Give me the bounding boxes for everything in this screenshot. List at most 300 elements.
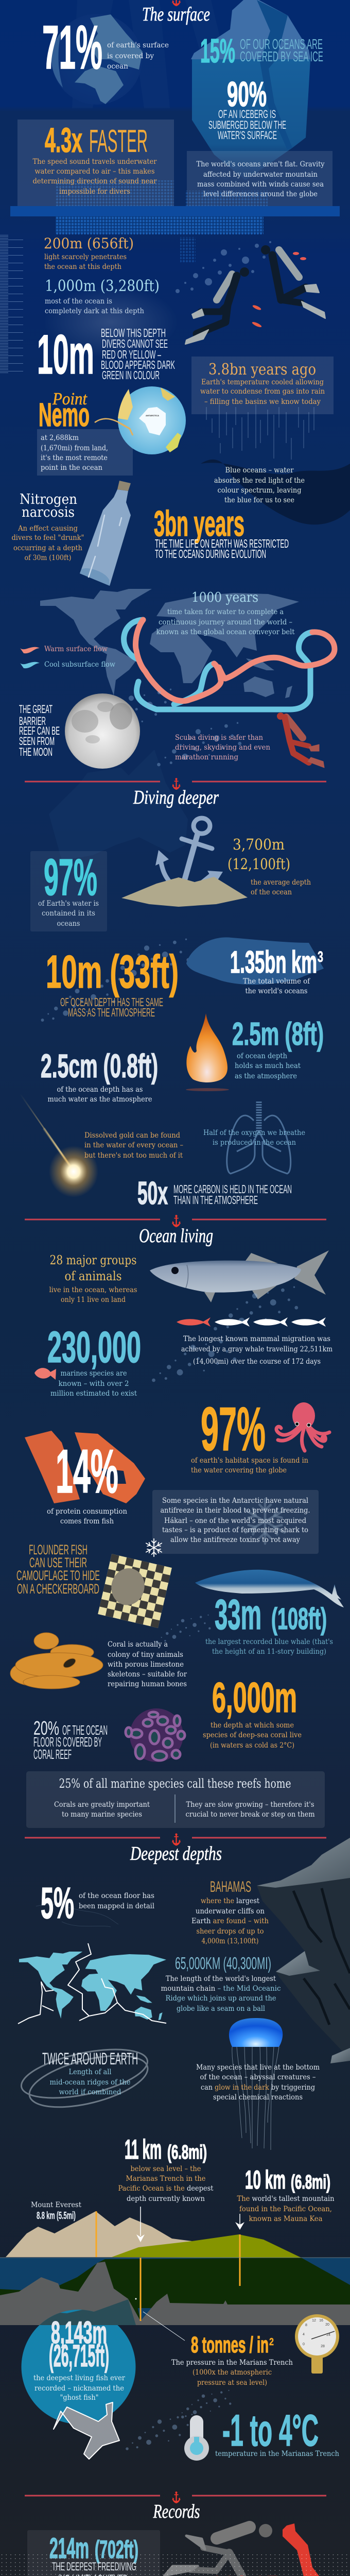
icon: pressure gauge: 0 (303, 2343, 305, 2346)
iceberg (191, 0, 310, 180)
text: twice around earth: world if combined (59, 2088, 121, 2096)
text: 28 major groups: 28 major groups (49, 1253, 137, 1267)
illustration: anchor in sand (121, 818, 248, 907)
illustration: underwater cliffs (257, 1838, 350, 2063)
icon: red diver (277, 713, 324, 768)
panel: reefs home: to many marine species (62, 1810, 142, 1819)
text: mountain chain: The length of the world's longest (166, 1975, 276, 1983)
panel: freediving record (27, 2530, 160, 2576)
icon: pressure gauge: 28 (321, 2345, 325, 2348)
stat: 33m whale: the height of an 11-story building) (212, 1648, 326, 1656)
stat: 50x carbon: 50x (137, 1176, 168, 1211)
icon: pressure gauge: 4 (303, 2333, 305, 2336)
legend: flows (20, 645, 115, 669)
text: dissolved gold: in the water of every ocean – (84, 1141, 183, 1149)
stat: 10m 33ft: OF OCEAN DEPTH HAS THE SAME (60, 995, 163, 1009)
stat: heat depth (232, 1016, 324, 1080)
panel: point nemo: it's the most remote (41, 454, 108, 462)
stat: 230000: 230,000 (47, 1323, 141, 1372)
bubbles near scuba text (157, 722, 241, 766)
image: flounder on checkerboard (98, 1554, 172, 1628)
illustration: flame (186, 1013, 229, 1091)
text: bahamas: underwater cliffs on (196, 1907, 265, 1916)
text: mountain chain: Ridge which joins up around the (166, 1994, 276, 2003)
icon: red fish (34, 1368, 56, 1380)
stat: water depth: much water as the atmosphere (47, 1095, 152, 1104)
text: OF THE OCEAN (62, 1722, 108, 1738)
divider: records (25, 2492, 326, 2503)
dark swirl (201, 460, 350, 524)
panel: 4.3x faster: The speed sound travels underwater (33, 158, 157, 166)
illustration: two divers (185, 245, 325, 344)
heading: diving deeper: Diving deeper (133, 787, 219, 808)
stat: pressure: 2 (269, 2336, 274, 2348)
text: scuba safer (175, 734, 270, 761)
panel: point nemo: at 2,688km (41, 434, 79, 442)
illustration: ghost fish (54, 2402, 119, 2459)
text: mountain chain: globe like a seam on a ball (177, 2005, 265, 2013)
text: bahamas: 4,000m (13,100ft) (202, 1937, 258, 1945)
stat: 6000m: species of deep-sea coral live (203, 1731, 302, 1739)
panel: oceans are not flat: The world's oceans aren't flat. Gravity (197, 160, 325, 168)
panel: point nemo: (1,670mi) from land, (41, 444, 108, 452)
text: flounder (16, 1542, 100, 1597)
depth: 200m: the ocean at this depth (44, 263, 121, 271)
stat: 10m 33ft: MASS AS THE ATMOSPHERE (68, 1006, 155, 1019)
stat: 10 km: 10 km (245, 2165, 286, 2194)
panel: 97 percent of water: contained in its (42, 909, 95, 918)
panel: oceans are not flat (187, 151, 332, 206)
stat: 3bn years (154, 503, 289, 561)
panel: 97 percent of water: 97% (44, 849, 97, 906)
panel: 4.3x faster: 4.3x (45, 121, 82, 160)
text: 1000 years: continuous journey around the world – (159, 618, 292, 626)
stat: 11 km: (6.8mi) (167, 2142, 207, 2163)
australia silhouette (49, 750, 188, 860)
text: whale migration (181, 1335, 332, 1366)
text: 1000 years: time taken for water to complete a (167, 608, 284, 616)
stat: 10m 33ft: 10m (33ft) (46, 946, 179, 998)
panel: 3.8bn years ago: Earth's temperature cooled allowing (201, 378, 324, 386)
text: coral: with porous limestone (108, 1660, 184, 1669)
stat: 10m: RED OR YELLOW – (102, 348, 161, 361)
panel: 4.3x faster (18, 120, 174, 206)
text: scuba safer: marathon running (175, 753, 238, 761)
stat: 10m: 10m (37, 323, 94, 385)
text: FLOOR IS COVERED BY (33, 1734, 102, 1750)
stat: 71 percent: 71% (42, 13, 102, 82)
point nemo title: Point (52, 389, 87, 409)
chart: depth cross-section (0, 2211, 350, 2325)
text: coral: skeletons – suitable for (108, 1670, 187, 1679)
text: twice around earth: mid-ocean ridges of the (49, 2078, 131, 2087)
text: average depth: the average depth (251, 878, 311, 887)
icon: anchor top (172, 0, 181, 6)
illustration: grey diver (164, 2524, 272, 2576)
text: nitrogen narcosis: occurring at a depth (13, 544, 82, 552)
legend: flows: Warm surface flow (44, 645, 108, 653)
stat: pressure: The pressure in the Marians Trench (171, 2359, 293, 2367)
panel: oceans are not flat: affected by underwater mountain (203, 171, 318, 179)
text: dissolved gold (84, 1131, 183, 1160)
text: great barrier reef: THE MOON (19, 745, 52, 758)
icon: pressure gauge: 8 (305, 2324, 307, 2327)
icon: globe (51, 14, 143, 105)
panel: oceans are not flat: mass combined with winds cause sea (197, 180, 324, 189)
text: 28 major groups: live in the ocean, whereas (49, 1286, 137, 1294)
text: oxygen (203, 1129, 305, 1147)
text: blue oceans: Blue oceans – water (225, 466, 294, 474)
text: abyssal creatures: Many species that live at the bottom (196, 2063, 320, 2072)
text: flounder: CAN USE THEIR (29, 1555, 87, 1570)
text: mountain chain: mountain chain – the Mid Oceanic (161, 1985, 281, 1993)
divider: deepest depths (25, 1833, 326, 1845)
text: oxygen: is produced in the ocean (213, 1139, 296, 1147)
light rays at the surface (72, 0, 237, 108)
stat: 71 percent: is covered by (107, 52, 154, 60)
text: 20 percent coral: CORAL REEF (33, 1747, 72, 1762)
circle: deepest living fish: (26,715ft) (49, 2338, 109, 2373)
depth: 200m: light scarcely penetrates (44, 253, 127, 261)
bubbles near board (156, 1615, 211, 1643)
text: nitrogen narcosis: divers to feel "drunk" (11, 534, 84, 542)
text: dissolved gold: but there's not too much of it (84, 1151, 183, 1160)
stat: 90 percent iceberg: 90% (227, 75, 267, 114)
text: abyssal creatures: of the ocean – abyssal creatures – (200, 2073, 316, 2081)
stat: pressure: 8 tonnes / in (191, 2332, 269, 2358)
stat: water depth: 2.5cm (0.8ft) (41, 1047, 158, 1084)
illustration: jellyfish (229, 2018, 283, 2150)
stat: 15 percent sea ice: 15% (200, 32, 235, 70)
text: twice around earth: Length of all (69, 2068, 111, 2076)
stat: 14 percent: comes from fish (60, 1517, 114, 1526)
stat: 5 percent mapped (36, 1879, 154, 1928)
conveyor belt ribbons (124, 620, 335, 709)
text: great barrier reef: SEEN FROM (19, 735, 55, 748)
stat: 6000m: the depth at which some (211, 1721, 294, 1730)
panel: 4.3x faster: determining direction of sound near (33, 177, 157, 185)
stat: 10 km: found in the Pacific Ocean, (239, 2205, 332, 2213)
bubbles near moon (90, 689, 174, 733)
stat: water depth: of the ocean depth has as (57, 1086, 143, 1094)
icon: pressure gauge: 20 (325, 2323, 329, 2327)
text: twice around earth: TWICE AROUND EARTH (42, 2049, 138, 2068)
illustration: bottle (80, 481, 131, 586)
stat: 11 km: Marianas Trench in the (126, 2175, 206, 2183)
stat: 90 percent iceberg: OF AN ICEBERG IS (218, 108, 276, 121)
water blob (186, 937, 324, 985)
point nemo title (39, 389, 90, 433)
heading: deepest depths: Deepest depths (130, 1843, 222, 1865)
stat: heat depth: holds as much heat (235, 1062, 301, 1070)
divider: ocean living (25, 1215, 326, 1227)
text: 28 major groups (49, 1253, 137, 1304)
stat: 90 percent iceberg: WATER'S SURFACE (218, 129, 277, 142)
panel: antifreeze: antifreeze in their blood to prevent freezing. (161, 1506, 310, 1515)
panel: reefs home: They are slow growing – therefore it's (186, 1801, 314, 1809)
rain (206, 404, 314, 460)
text: 28 major groups: only 11 live on land (61, 1296, 126, 1304)
stat: 90 percent iceberg (208, 75, 286, 142)
text: dissolved gold: Dissolved gold can be found (84, 1131, 180, 1140)
text: blue oceans: colour spectrum, leaving (217, 486, 302, 495)
text: average depth: (12,100ft) (227, 855, 290, 873)
panel: antifreeze: Hákarl – one of the world's most acquired (164, 1517, 306, 1525)
text: bahamas: where the largest (201, 1897, 259, 1905)
circle: deepest living fish: recorded – nicknamed the (34, 2384, 124, 2393)
circle: deepest living fish: the deepest living fish ever (33, 2374, 126, 2382)
text: bahamas: sheer drops of up to (197, 1927, 264, 1936)
heading: records: Records (153, 2501, 200, 2522)
text: 1000 years: known as the global ocean conveyor belt (156, 628, 294, 636)
stat: total volume: 3 (318, 948, 323, 965)
panel: antifreeze: tastes – is a product of fermenting shark to (162, 1526, 308, 1534)
panel: 4.3x faster: water compared to air – this makes (35, 167, 154, 176)
text: blue oceans (214, 466, 305, 504)
illustration: blue whale (195, 1570, 344, 1607)
legend: flows: Cool subsurface flow (44, 660, 115, 669)
depth: 1000m: 1,000m (3,280ft) (45, 277, 160, 295)
text: bahamas: Earth are found – with (191, 1917, 269, 1925)
panel: antifreeze: Some species in the Antarctic have natural (162, 1497, 308, 1505)
text: blue oceans: absorbs the red light of the (214, 477, 305, 485)
panel: antifreeze: allow the antifreeze toxins to rot away (170, 1536, 301, 1544)
arrow: nemo to globe (95, 419, 130, 429)
stat: 33m whale: 33m (215, 1590, 261, 1638)
illustration: moon (65, 693, 140, 769)
stat: 50x carbon (137, 1176, 292, 1211)
panel: 97 percent of water: of Earth's water is (38, 900, 99, 908)
text: great barrier reef: THE GREAT (19, 703, 52, 716)
stat: 90 percent iceberg: SUBMERGED BELOW THE (208, 118, 286, 131)
panel: 3.8bn years ago: 3.8bn years ago (208, 361, 316, 379)
text: whale migration: (14,000mi) over the course of 172 days (193, 1358, 321, 1366)
text: coral (108, 1640, 187, 1688)
text: nitrogen narcosis: Nitrogen (20, 492, 77, 507)
stat: 14 percent: of protein consumption (47, 1507, 127, 1516)
panel: 97 percent of water: oceans (57, 920, 80, 928)
text: 1000 years: 1000 years (191, 590, 258, 605)
stat: 6000m: (in waters as cold as 2°C) (210, 1741, 294, 1750)
line: pressure callout (143, 2312, 185, 2341)
stat: 10m: GREEN IN COLOUR (102, 368, 160, 382)
panel: 3.8bn years ago (191, 357, 334, 414)
circle: deepest living fish: "ghost fish" (60, 2394, 99, 2402)
stat: 3bn years: 3bn years (154, 503, 244, 544)
stat: 5 percent mapped: been mapped in detail (79, 1902, 154, 1910)
circle: deepest living fish: 8,143m (51, 2315, 107, 2350)
heading: ocean living: Ocean living (139, 1225, 213, 1247)
text: marine species: million estimated to exist (50, 1389, 137, 1398)
depth: 1000m: most of the ocean is (45, 297, 112, 306)
stat: 10m: BLOOD APPEARS DARK (101, 358, 175, 371)
text: nitrogen narcosis: An effect causing (18, 524, 78, 533)
text: 1000 years (156, 590, 294, 636)
bubbles near temperature (126, 2390, 231, 2450)
stat: 10m 33ft (46, 946, 179, 1019)
text: flounder: ON A CHECKERBOARD (17, 1581, 99, 1597)
stat: 6000m (203, 1673, 302, 1750)
stat: 15 percent sea ice (200, 32, 323, 70)
text: mount everest (31, 2201, 81, 2222)
text: marine species: known – with over 2 (59, 1380, 129, 1388)
panel: 3.8bn years ago: – filling the basins we know today (204, 398, 321, 406)
text: whale migration: The longest known mammal migration was (183, 1335, 330, 1343)
text: coral: repairing human bones (108, 1680, 187, 1688)
stat: pressure: pressure at sea level) (197, 2379, 267, 2387)
stat: 11 km: Pacific Ocean is the deepest (118, 2184, 214, 2193)
bubbles near fish (152, 1286, 298, 1382)
panel: reefs home: 25% of all marine species call these reefs home (59, 1776, 291, 1791)
text: flounder: CAMOUFLAGE TO HIDE (16, 1568, 100, 1583)
dot overlay (0, 2551, 350, 2576)
text: mount everest: 8.8 km (5.5mi) (37, 2210, 76, 2222)
text: mountain chain (161, 1954, 281, 2013)
arrow: to trench (136, 2207, 145, 2242)
panel: oceans are not flat: level differences around the globe (203, 190, 318, 198)
icon row: fish scale (177, 1317, 326, 1327)
depth ticks (0, 234, 23, 374)
text: scuba safer: driving, skydiving and even (175, 743, 270, 752)
text: nitrogen narcosis: of 30m (100ft) (25, 554, 71, 562)
stat: 10 km (237, 2165, 335, 2223)
halftone sound wave (10, 180, 340, 263)
icon: octopus (276, 1402, 329, 1451)
depth: 1000m: completely dark at this depth (45, 307, 144, 315)
text: twice around earth (17, 2040, 153, 2117)
stat: 71 percent: ocean (107, 62, 128, 71)
stat: 11 km (118, 2134, 214, 2203)
text: scuba safer: Scuba diving is safer than (175, 734, 263, 742)
stat: 10m: DIVERS CANNOT SEE (102, 337, 168, 350)
text: abyssal creatures: can glow in the dark by triggering (201, 2083, 315, 2092)
icon: lungs (227, 1101, 291, 1174)
text: average depth: 3,700m (233, 836, 285, 853)
text: whale migration: achieved by a gray whale travelling 22,511km (181, 1345, 332, 1353)
stat: 33m whale (205, 1590, 333, 1656)
panel: 3.8bn years ago: water to condense from gas into rain (200, 387, 325, 396)
map: world (40, 589, 299, 698)
stat: 10m: BELOW THIS DEPTH (101, 326, 166, 340)
light glow (44, 286, 178, 358)
stat: 10 km: The world's tallest mountain (237, 2195, 335, 2203)
text: average depth: of the ocean (251, 888, 292, 896)
text: coral: Coral is actually a (108, 1640, 168, 1649)
panel: 97 percent of water (30, 849, 107, 931)
stat: 97 percent habitat: the water covering the globe (191, 1466, 287, 1475)
text: nitrogen narcosis: narcosis (22, 504, 75, 520)
text: blue oceans: the blue for us to see (224, 496, 294, 504)
point nemo title: Nemo (39, 396, 90, 433)
illustration: purple coral (126, 1708, 185, 1762)
text: oxygen: Half of the oxygen we breathe (203, 1129, 305, 1137)
icon: pressure gauge: 12 (312, 2319, 316, 2323)
icon: thermometer (184, 2415, 209, 2461)
stat: 97 percent habitat: of earth's habitat space is found in (191, 1456, 308, 1465)
stat: 50x carbon: THAN IN THE ATMOSPHERE (173, 1193, 258, 1207)
stat: 97 percent habitat: 97% (201, 1395, 266, 1464)
panel: freediving record: THE DEEPEST FREEDIVING (52, 2560, 136, 2573)
text: great barrier reef: REEF CAN BE (19, 724, 60, 737)
text: bahamas (191, 1878, 269, 1945)
stat: 10 km: known as Mauna Kea (249, 2215, 323, 2223)
text: mountain chain: 65,000KM (40,300MI) (175, 1954, 271, 1973)
depth: 200m: 200m (656ft) (44, 235, 134, 252)
circle: deepest living fish (15, 2299, 136, 2424)
panel: reefs home: crucial to never break or step on them (185, 1810, 315, 1819)
text: average depth (227, 836, 311, 896)
stat: 14 percent (47, 1437, 127, 1526)
text: 20 percent coral: 20% (33, 1718, 59, 1739)
text: flounder: FLOUNDER FISH (29, 1542, 87, 1557)
stat: pressure: (1000x the atmospheric (192, 2368, 272, 2377)
stat: 11 km: 11 km (125, 2134, 162, 2165)
stat: 71 percent: of earth's surface (107, 41, 169, 49)
stat: total volume (230, 945, 323, 995)
bubbles near 10m (41, 939, 190, 1022)
stat: pressure (171, 2332, 293, 2387)
panel: reefs home: Corals are greatly important (54, 1801, 150, 1809)
panel: freediving record: (702ft) (95, 2536, 138, 2564)
text: great barrier reef (19, 703, 60, 758)
icon: pressure gauge: 24 (326, 2333, 330, 2337)
icon: pressure gauge (295, 2314, 339, 2374)
illustration: large fish (150, 1250, 329, 1302)
text: marine species: marines species are (61, 1369, 127, 1378)
heading: the surface: The surface (142, 4, 210, 25)
stat: 11 km: below sea level – the (131, 2165, 201, 2173)
map: antarctic globe (118, 386, 186, 454)
text: 20 percent coral (33, 1718, 108, 1762)
illustration: gold meteor (20, 1094, 98, 1197)
icon: snowflake (146, 1539, 162, 1556)
map: mid-ocean ridge (18, 1943, 166, 2024)
text: marine species (50, 1369, 137, 1398)
stat: 33m whale: the largest recorded blue whale (that's (205, 1638, 333, 1646)
text: nitrogen narcosis (11, 492, 84, 562)
stat: 11 km: depth currently known (127, 2195, 205, 2203)
stat: 14 percent: 14% (56, 1437, 118, 1506)
panel: freediving record: 214m (49, 2532, 89, 2564)
stat: total volume: the world's oceans (245, 987, 308, 995)
depth: 1000m (45, 277, 160, 315)
stat: temperature: temperature in the Marianas Trench (215, 2450, 339, 2458)
panel: 4.3x faster: impossible for divers (59, 188, 130, 196)
illustration: salmon steaks (25, 1431, 145, 1503)
text: 28 major groups: of animals (65, 1269, 121, 1283)
stat: 5 percent mapped: of the ocean floor has (79, 1892, 154, 1900)
depth: 200m (44, 235, 134, 271)
text: great barrier reef: BARRIER (19, 715, 46, 727)
divider: diving deeper (25, 778, 326, 790)
illustration: orange coral (10, 1633, 103, 1689)
stat: water depth (41, 1047, 158, 1104)
map: antarctic globe: ANTARCTICA (146, 414, 159, 417)
text: abyssal creatures (196, 2063, 320, 2102)
text: abyssal creatures: special chemical reactions (213, 2093, 303, 2102)
text: coral: colony of tiny animals (108, 1651, 183, 1659)
bubbles near divers (176, 241, 275, 293)
arrow: to mauna kea (235, 2214, 244, 2230)
text: mount everest: Mount Everest (31, 2201, 81, 2209)
text: bahamas: BAHAMAS (210, 1878, 251, 1895)
stat: heat depth: of ocean depth (237, 1052, 287, 1060)
panel: antifreeze (152, 1490, 319, 1554)
panel: point nemo: point in the ocean (41, 464, 102, 472)
panel: point nemo (37, 429, 133, 476)
map: red sea (283, 2523, 337, 2576)
stat: heat depth: as the atmosphere (235, 1072, 297, 1080)
